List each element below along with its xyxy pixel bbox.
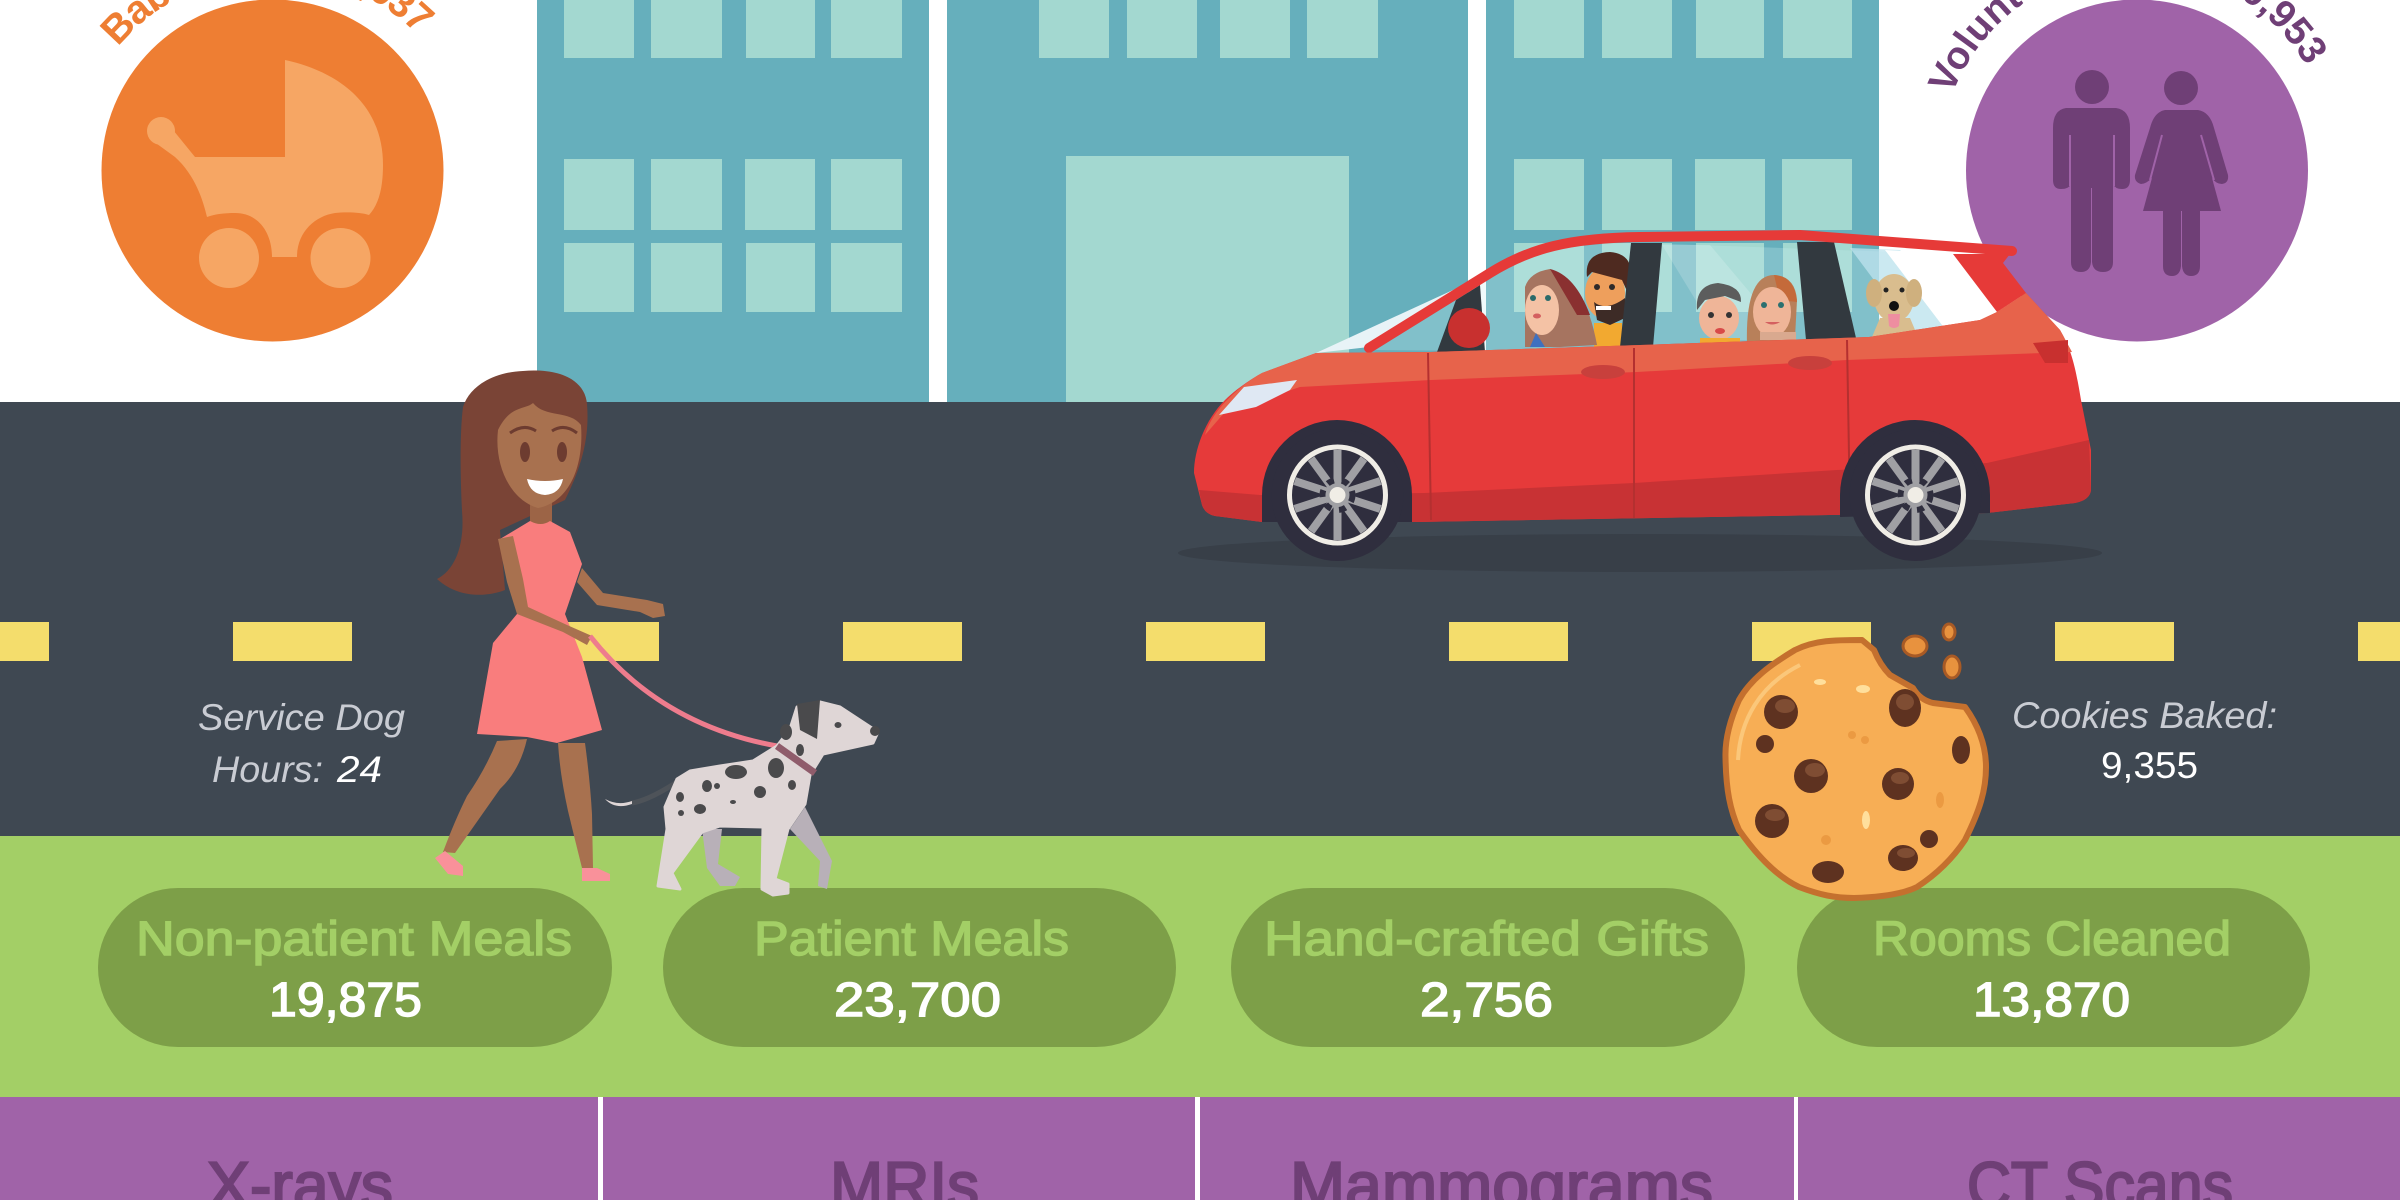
pill: patient meals: 23,700 — [834, 974, 1001, 1027]
pill: hand-crafted gifts: 2,756 — [1420, 974, 1553, 1027]
handles — [1581, 365, 1625, 379]
service dog text: Hours: — [212, 749, 323, 790]
babies badge — [100, 0, 444, 342]
pill: patient meals — [663, 888, 1176, 1047]
woman passenger — [1525, 269, 1597, 347]
dog passenger — [1866, 274, 1922, 337]
body — [658, 702, 878, 895]
pill: hand-crafted gifts: Hand-crafted Gifts — [1264, 913, 1709, 966]
mirror — [1448, 308, 1490, 348]
pill: patient meals: Patient Meals — [754, 913, 1069, 966]
shadow — [1178, 534, 2102, 572]
neck — [530, 495, 552, 525]
pill: non-patient meals — [98, 888, 612, 1047]
man — [1585, 252, 1631, 349]
cookies text: Cookies Baked: — [2012, 695, 2277, 736]
service dog text: Service Dog — [198, 697, 405, 738]
tail lamp — [2033, 340, 2068, 363]
pill: rooms cleaned — [1797, 888, 2310, 1047]
lower shadow band — [1199, 440, 2091, 522]
road — [0, 402, 2400, 836]
rear quarter — [1953, 254, 2026, 312]
shoes — [435, 851, 463, 876]
door lines — [1428, 340, 1850, 520]
collar — [777, 746, 815, 773]
icon: baby stroller — [147, 60, 383, 288]
service dog text: 24 — [336, 749, 382, 790]
family car — [1178, 235, 2102, 572]
headlight — [1219, 380, 1297, 415]
pill: rooms cleaned: Rooms Cleaned — [1873, 913, 2231, 966]
boy — [1697, 283, 1741, 343]
girl — [1747, 275, 1797, 345]
front wheel — [1262, 420, 1412, 561]
roof — [1369, 235, 2012, 348]
buildings — [537, 0, 1879, 403]
rear wheel — [1840, 420, 1990, 561]
hair — [437, 371, 588, 595]
stat pills — [98, 888, 2310, 1047]
cookies text — [2012, 695, 2277, 786]
window glass — [1375, 243, 1997, 351]
dress — [477, 521, 602, 743]
body highlight — [1205, 293, 2072, 435]
imaging band — [0, 1097, 2400, 1200]
cookie — [1725, 624, 1986, 898]
passengers — [1525, 252, 1922, 349]
service dog text — [198, 697, 405, 790]
front arm — [498, 536, 592, 645]
dalmatian dog — [605, 700, 880, 895]
icon: man and woman — [2053, 70, 2228, 276]
cookies text: 9,355 — [2101, 745, 2198, 786]
tail — [632, 780, 680, 803]
pill: rooms cleaned: 13,870 — [1973, 974, 2130, 1027]
back arm — [577, 568, 665, 618]
windshield glass — [1316, 273, 1490, 353]
far legs — [702, 829, 740, 886]
grass strip — [0, 836, 2400, 1097]
ear and spots — [676, 700, 880, 816]
face — [497, 403, 581, 508]
body — [1194, 293, 2091, 522]
pill: hand-crafted gifts — [1231, 888, 1745, 1047]
window pillars — [1620, 243, 1662, 347]
leash — [590, 636, 777, 746]
legs — [443, 739, 527, 853]
pill: non-patient meals: 19,875 — [269, 974, 422, 1027]
woman walking — [435, 371, 777, 881]
pill: non-patient meals: Non-patient Meals — [136, 913, 572, 966]
volunteers badge — [1927, 0, 2326, 342]
